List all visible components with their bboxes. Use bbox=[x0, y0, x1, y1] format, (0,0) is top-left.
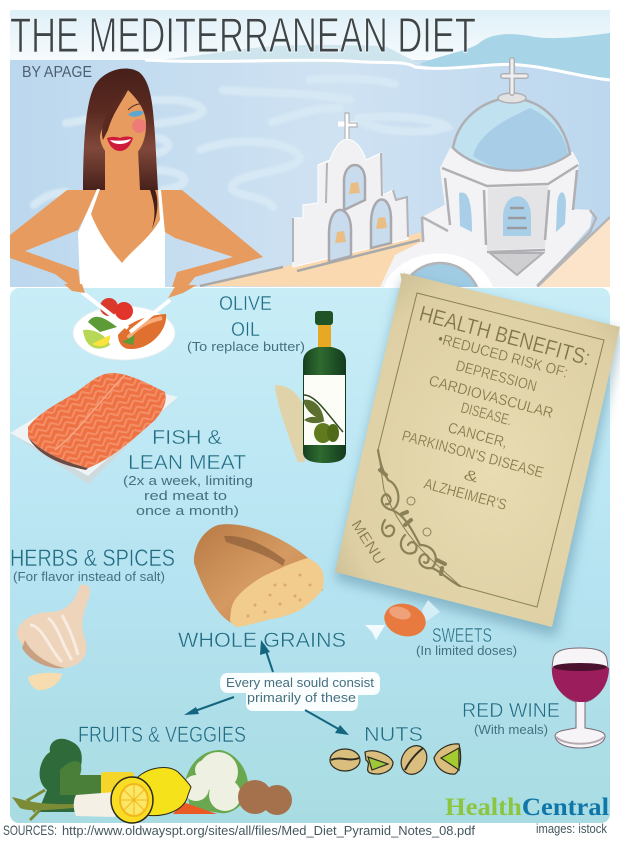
icon: garlic bbox=[17, 585, 90, 690]
arched doorway bbox=[384, 253, 493, 287]
icon: vegetables and lemons bbox=[12, 739, 292, 823]
drum bbox=[440, 148, 579, 230]
panel: health benefits menu card bbox=[335, 273, 620, 627]
left arm bbox=[10, 190, 98, 287]
benefits list: CANCER, bbox=[446, 419, 509, 452]
arrow: to whole grains bbox=[260, 640, 273, 672]
benefits list: ALZHEIMER'S bbox=[422, 475, 508, 514]
panel: harbor scene header bbox=[10, 10, 610, 287]
image credit: images: istock bbox=[536, 821, 607, 836]
benefits list: DISEASE. bbox=[459, 399, 514, 429]
menu inner frame bbox=[378, 293, 604, 607]
bell tower bbox=[293, 113, 420, 271]
distant island bbox=[164, 45, 412, 60]
label: red wine: (With meals) bbox=[474, 722, 548, 737]
label: fish and lean meat: (2x a week, limiting bbox=[123, 473, 253, 488]
label: fruits and veggies: FRUITS & VEGGIES bbox=[78, 722, 246, 747]
sand bbox=[200, 232, 440, 287]
label: fish and lean meat: once a month) bbox=[136, 503, 239, 518]
icon: salmon fillet bbox=[10, 373, 178, 484]
benefits list: PARKINSON'S DISEASE bbox=[400, 427, 545, 482]
lemon bbox=[133, 768, 191, 816]
sources line: http://www.oldwayspt.org/sites/all/files/Med_Diet_Pyramid_Notes_08.pdf bbox=[62, 823, 475, 838]
label: fish and lean meat: LEAN MEAT bbox=[128, 452, 246, 474]
benefits list: •REDUCED RISK OF: bbox=[436, 330, 570, 382]
fork and knife bbox=[82, 292, 170, 332]
label: herbs and spices: (For flavor instead of salt) bbox=[13, 569, 165, 584]
benefits list: & bbox=[462, 466, 480, 486]
mouth bbox=[107, 136, 133, 151]
label: sweets: (In limited doses) bbox=[416, 643, 517, 658]
potatoes bbox=[238, 780, 272, 814]
icon: wine glass bbox=[552, 648, 609, 748]
bell windows bbox=[329, 165, 391, 262]
callout: every meal: Every meal sould consist bbox=[226, 675, 374, 690]
icon: bread bbox=[194, 524, 324, 627]
label: red wine bbox=[462, 700, 560, 737]
label: olive oil bbox=[187, 293, 305, 354]
label: fish and lean meat: red meat to bbox=[144, 488, 227, 503]
callout: every meal bbox=[220, 672, 380, 711]
cross bbox=[338, 114, 357, 139]
shoreline bbox=[145, 60, 610, 80]
stray hair strand bbox=[150, 190, 157, 229]
torso bbox=[91, 150, 160, 263]
logo: HealthCentral: HealthCentral bbox=[445, 794, 609, 821]
label: red wine: RED WINE bbox=[462, 700, 560, 722]
label: herbs and spices: HERBS & SPICES bbox=[10, 545, 175, 572]
label: herbs and spices bbox=[10, 545, 175, 584]
label: olive oil: OIL bbox=[231, 319, 260, 341]
benefits list: CARDIOVASCULAR bbox=[427, 372, 555, 422]
label: olive oil: (To replace butter) bbox=[187, 339, 305, 354]
label: sweets bbox=[416, 625, 517, 658]
cross on dome bbox=[498, 60, 526, 103]
icon: olive oil bottle bbox=[275, 311, 346, 463]
icon: plate of food bbox=[73, 292, 175, 360]
label: fish and lean meat: FISH & bbox=[152, 427, 223, 449]
label: whole grains: WHOLE GRAINS bbox=[178, 629, 346, 652]
label: olive oil: OLIVE bbox=[219, 293, 272, 315]
sources line: SOURCES: bbox=[3, 822, 57, 838]
arrow: to fruits and veggies bbox=[184, 697, 234, 715]
benefits list: DEPRESSION bbox=[454, 357, 539, 395]
right arm bbox=[160, 190, 263, 287]
dome bbox=[453, 98, 570, 170]
panel: food background bbox=[10, 288, 610, 823]
diamond keystone bbox=[490, 253, 543, 275]
menu ornament bbox=[378, 450, 460, 586]
arrow: to nuts bbox=[305, 710, 349, 735]
byline: BY APAGE bbox=[22, 64, 92, 81]
carrot bbox=[173, 802, 217, 814]
church windows bbox=[459, 192, 566, 236]
benefits list bbox=[400, 330, 570, 514]
menu label: MENU bbox=[348, 517, 388, 568]
hair back bbox=[83, 68, 158, 191]
domed church bbox=[380, 60, 596, 287]
menu card shadow bbox=[335, 278, 620, 637]
icon: pistachios bbox=[330, 741, 461, 779]
icon: wrapped candy bbox=[365, 599, 440, 641]
sea swirls bbox=[34, 78, 447, 207]
cauliflower bbox=[185, 750, 248, 813]
menu heading: HEALTH BENEFITS: bbox=[417, 301, 593, 370]
label: fish and lean meat bbox=[123, 427, 253, 518]
hands holding cutlery bbox=[64, 284, 197, 298]
eye bbox=[128, 111, 144, 117]
woman with plate bbox=[10, 68, 263, 287]
label: nuts: NUTS bbox=[364, 724, 423, 746]
white dress bbox=[78, 189, 165, 287]
label: sweets: SWEETS bbox=[432, 625, 492, 647]
face bbox=[100, 90, 146, 152]
callout: every meal: primarily of these bbox=[247, 690, 356, 705]
